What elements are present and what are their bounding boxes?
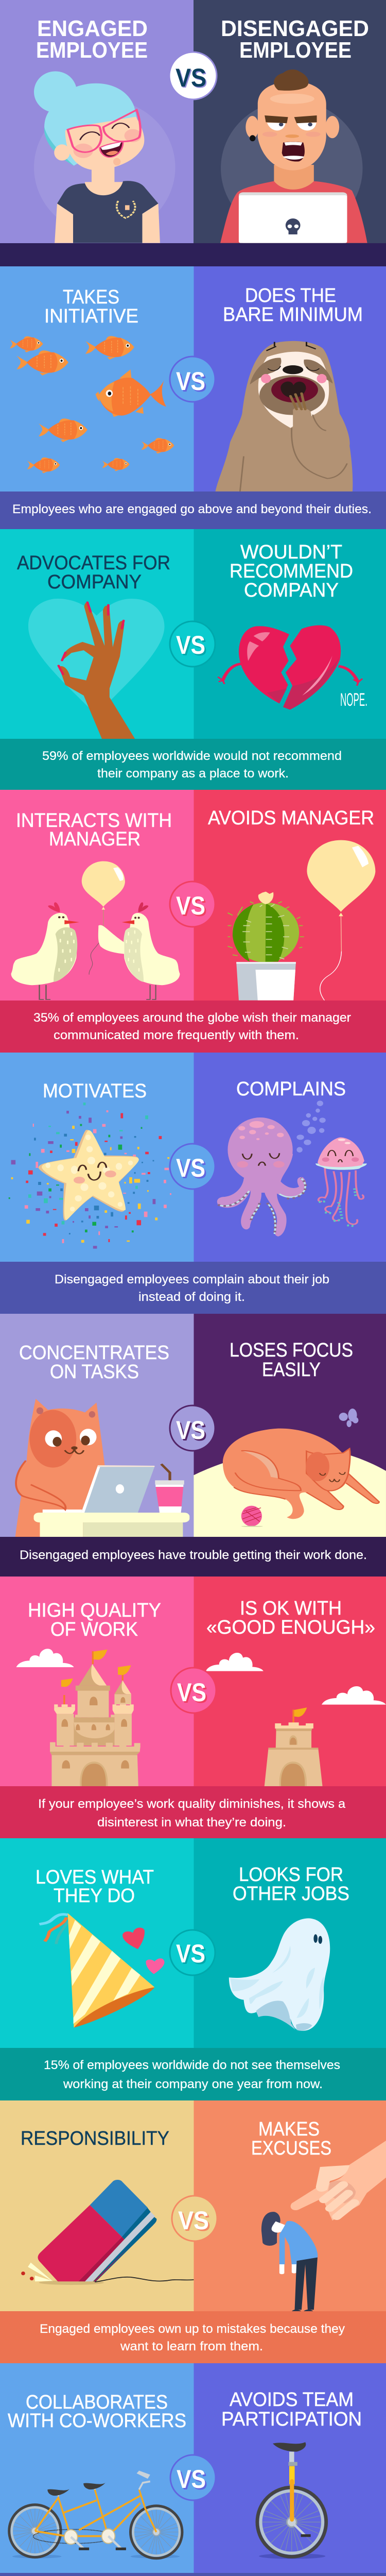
heading: avoids manager: AVOIDS MANAGER — [208, 807, 374, 829]
caption band — [0, 1786, 386, 1838]
vs badge: VS — [177, 1678, 206, 1707]
heading: advocates for company — [17, 552, 170, 593]
heading: takes initiative — [44, 286, 138, 327]
illustration: broken heart — [218, 625, 362, 710]
heading: makes excuses — [251, 2119, 331, 2159]
section: advocacy — [0, 529, 386, 790]
heading: wouldn't recommend company: RECOMMEND — [230, 561, 353, 582]
illustration: hand pointing at woman — [261, 2141, 386, 2312]
caption band — [0, 2048, 386, 2100]
caption band: communicated more frequently with them. — [54, 1028, 299, 1042]
heading: engaged employee: ENGAGED — [37, 16, 148, 41]
heading: makes excuses: MAKES — [258, 2119, 320, 2140]
illustration: eraser — [21, 2180, 194, 2285]
vs badge — [171, 1668, 216, 1713]
vs badge: VS — [176, 367, 205, 396]
heading: is ok with good enough: «GOOD ENOUGH» — [206, 1617, 375, 1638]
heading: avoids team participation — [221, 2389, 362, 2430]
heading: avoids team participation: AVOIDS TEAM — [230, 2389, 354, 2411]
illustration: small sandcastle with clouds — [206, 1653, 386, 1786]
section: quality — [0, 1577, 386, 1838]
heading: high quality of work: OF WORK — [50, 1619, 138, 1640]
heading: looks for other jobs: LOOKS FOR — [239, 1864, 343, 1886]
heading: looks for other jobs: OTHER JOBS — [233, 1883, 349, 1905]
illustration: sleeping cat — [194, 1409, 386, 1537]
heading: collaborates with co-workers: COLLABORATES — [26, 2392, 168, 2413]
illustration: cat at laptop — [15, 1399, 189, 1537]
heading: is ok with good enough: IS OK WITH — [240, 1598, 342, 1619]
heading: advocates for company: ADVOCATES FOR — [17, 552, 170, 574]
caption band — [0, 492, 386, 529]
caption band: Disengaged employees have trouble getting their work done. — [20, 1548, 367, 1562]
heading: does the bare minimum — [223, 285, 363, 326]
heading: high quality of work: HIGH QUALITY — [28, 1600, 161, 1621]
heading: loses focus easily: EASILY — [262, 1359, 321, 1381]
heading: takes initiative: TAKES — [63, 286, 119, 308]
heading: loses focus easily — [230, 1340, 353, 1381]
caption band: want to learn from them. — [120, 2340, 263, 2353]
caption band: instead of doing it. — [138, 1290, 245, 1304]
vs badge — [169, 52, 217, 99]
caption band — [0, 2311, 386, 2363]
heading: complains: COMPLAINS — [236, 1078, 346, 1100]
heading: avoids team participation: PARTICIPATION — [221, 2409, 362, 2430]
heading: loves what they do: THEY DO — [54, 1885, 135, 1907]
caption band — [0, 1537, 386, 1577]
illustration: cactus and big balloon — [227, 840, 375, 1001]
vs badge: VS — [176, 63, 206, 92]
illustration: sad octopus and jellyfish — [217, 1100, 367, 1236]
illustration: ok hand on heart — [28, 599, 165, 739]
heading: is ok with good enough — [206, 1598, 375, 1638]
vs badge — [172, 2196, 217, 2241]
illustration: ghost — [229, 1918, 330, 2031]
section: manager — [0, 790, 386, 1053]
heading: high quality of work — [28, 1600, 161, 1640]
vs badge: VS — [176, 1154, 205, 1182]
heading: concentrates on tasks: CONCENTRATES — [19, 1342, 169, 1364]
heading: motivates: MOTIVATES — [43, 1080, 147, 1102]
illustration: smiling star with confetti — [9, 1103, 171, 1249]
heading: concentrates on tasks: ON TASKS — [50, 1361, 139, 1383]
vs badge — [170, 2455, 216, 2500]
vs badge: VS — [176, 1416, 205, 1445]
vs badge — [170, 621, 215, 667]
heading: makes excuses: EXCUSES — [251, 2138, 331, 2159]
caption band: working at their company one year from now. — [63, 2077, 323, 2091]
caption band — [0, 1001, 386, 1053]
heading: responsibility: RESPONSIBILITY — [21, 2128, 169, 2149]
vs badge: VS — [176, 1939, 205, 1968]
heading: loves what they do: LOVES WHAT — [36, 1867, 154, 1888]
illustration: angry man with laptop — [220, 70, 367, 243]
illustration: two hens with balloon — [11, 861, 180, 999]
caption band: If your employee’s work quality diminishes, it shows a — [38, 1797, 346, 1811]
heading: collaborates with co-workers: WITH CO-WORKERS — [8, 2410, 186, 2432]
dark divider band — [0, 243, 386, 266]
caption band — [0, 2573, 386, 2576]
heading: concentrates on tasks — [19, 1342, 169, 1383]
illustration: school of goldfish — [10, 336, 174, 473]
heading: takes initiative: INITIATIVE — [44, 306, 138, 327]
vs badge: VS — [176, 631, 205, 659]
heading: does the bare minimum: DOES THE — [245, 285, 336, 307]
heading: engaged employee — [36, 16, 148, 63]
vs badge: VS — [176, 891, 205, 920]
heading: wouldn't recommend company: WOULDN’T — [240, 541, 342, 563]
caption band: 35% of employees around the globe wish their manager — [33, 1011, 351, 1025]
heading: interacts with manager — [16, 810, 172, 850]
heading: loses focus easily: LOSES FOCUS — [230, 1340, 353, 1361]
heading: interacts with manager: MANAGER — [49, 828, 141, 850]
illustration: unicycle — [257, 2442, 326, 2559]
vs badge: VS — [177, 2465, 206, 2494]
caption band: Disengaged employees complain about their job — [55, 1273, 329, 1286]
section: focus — [0, 1314, 386, 1577]
heading: wouldn't recommend company: COMPANY — [244, 580, 339, 601]
heading: disengaged employee: DISENGAGED — [221, 16, 369, 41]
section: initiative — [0, 266, 386, 529]
illustration: party hat and hearts — [40, 1913, 165, 2028]
section: motivation — [0, 1053, 386, 1314]
heading: engaged employee: EMPLOYEE — [36, 38, 148, 63]
heading: looks for other jobs — [233, 1864, 349, 1905]
heading: does the bare minimum: BARE MINIMUM — [223, 304, 363, 326]
caption band: 59% of employees worldwide would not recommend — [42, 749, 342, 763]
vs badge — [170, 1930, 215, 1975]
section: teamwork — [0, 2363, 386, 2576]
caption band: their company as a place to work. — [97, 767, 289, 781]
illustration: happy woman with glasses — [34, 71, 176, 243]
caption band: disinterest in what they’re doing. — [97, 1816, 286, 1829]
heading: disengaged employee: EMPLOYEE — [239, 38, 352, 63]
caption band: Employees who are engaged go above and beyond their duties. — [12, 502, 372, 516]
vs badge — [170, 882, 215, 927]
caption band — [0, 739, 386, 790]
illustration: tandem bicycle — [9, 2470, 182, 2558]
caption band — [0, 1262, 386, 1314]
heading: disengaged employee — [221, 16, 369, 63]
section: job satisfaction — [0, 1838, 386, 2100]
caption band: Engaged employees own up to mistakes because they — [40, 2322, 345, 2336]
heading: loves what they do — [36, 1867, 154, 1907]
vs badge: VS — [178, 2206, 209, 2235]
vs badge — [170, 357, 215, 402]
section: header — [0, 0, 386, 266]
vs badge — [170, 1405, 215, 1451]
illustration: big sandcastle with clouds — [16, 1649, 141, 1786]
section: responsibility — [0, 2100, 386, 2363]
heading: collaborates with co-workers — [8, 2392, 186, 2432]
heading: wouldn't recommend company — [230, 541, 353, 601]
illustration: yawning sloth — [216, 341, 353, 492]
heading: advocates for company: COMPANY — [47, 571, 142, 593]
vs badge — [170, 1144, 215, 1189]
heading: interacts with manager: INTERACTS WITH — [16, 810, 172, 832]
caption band: 15% of employees worldwide do not see themselves — [44, 2058, 340, 2072]
